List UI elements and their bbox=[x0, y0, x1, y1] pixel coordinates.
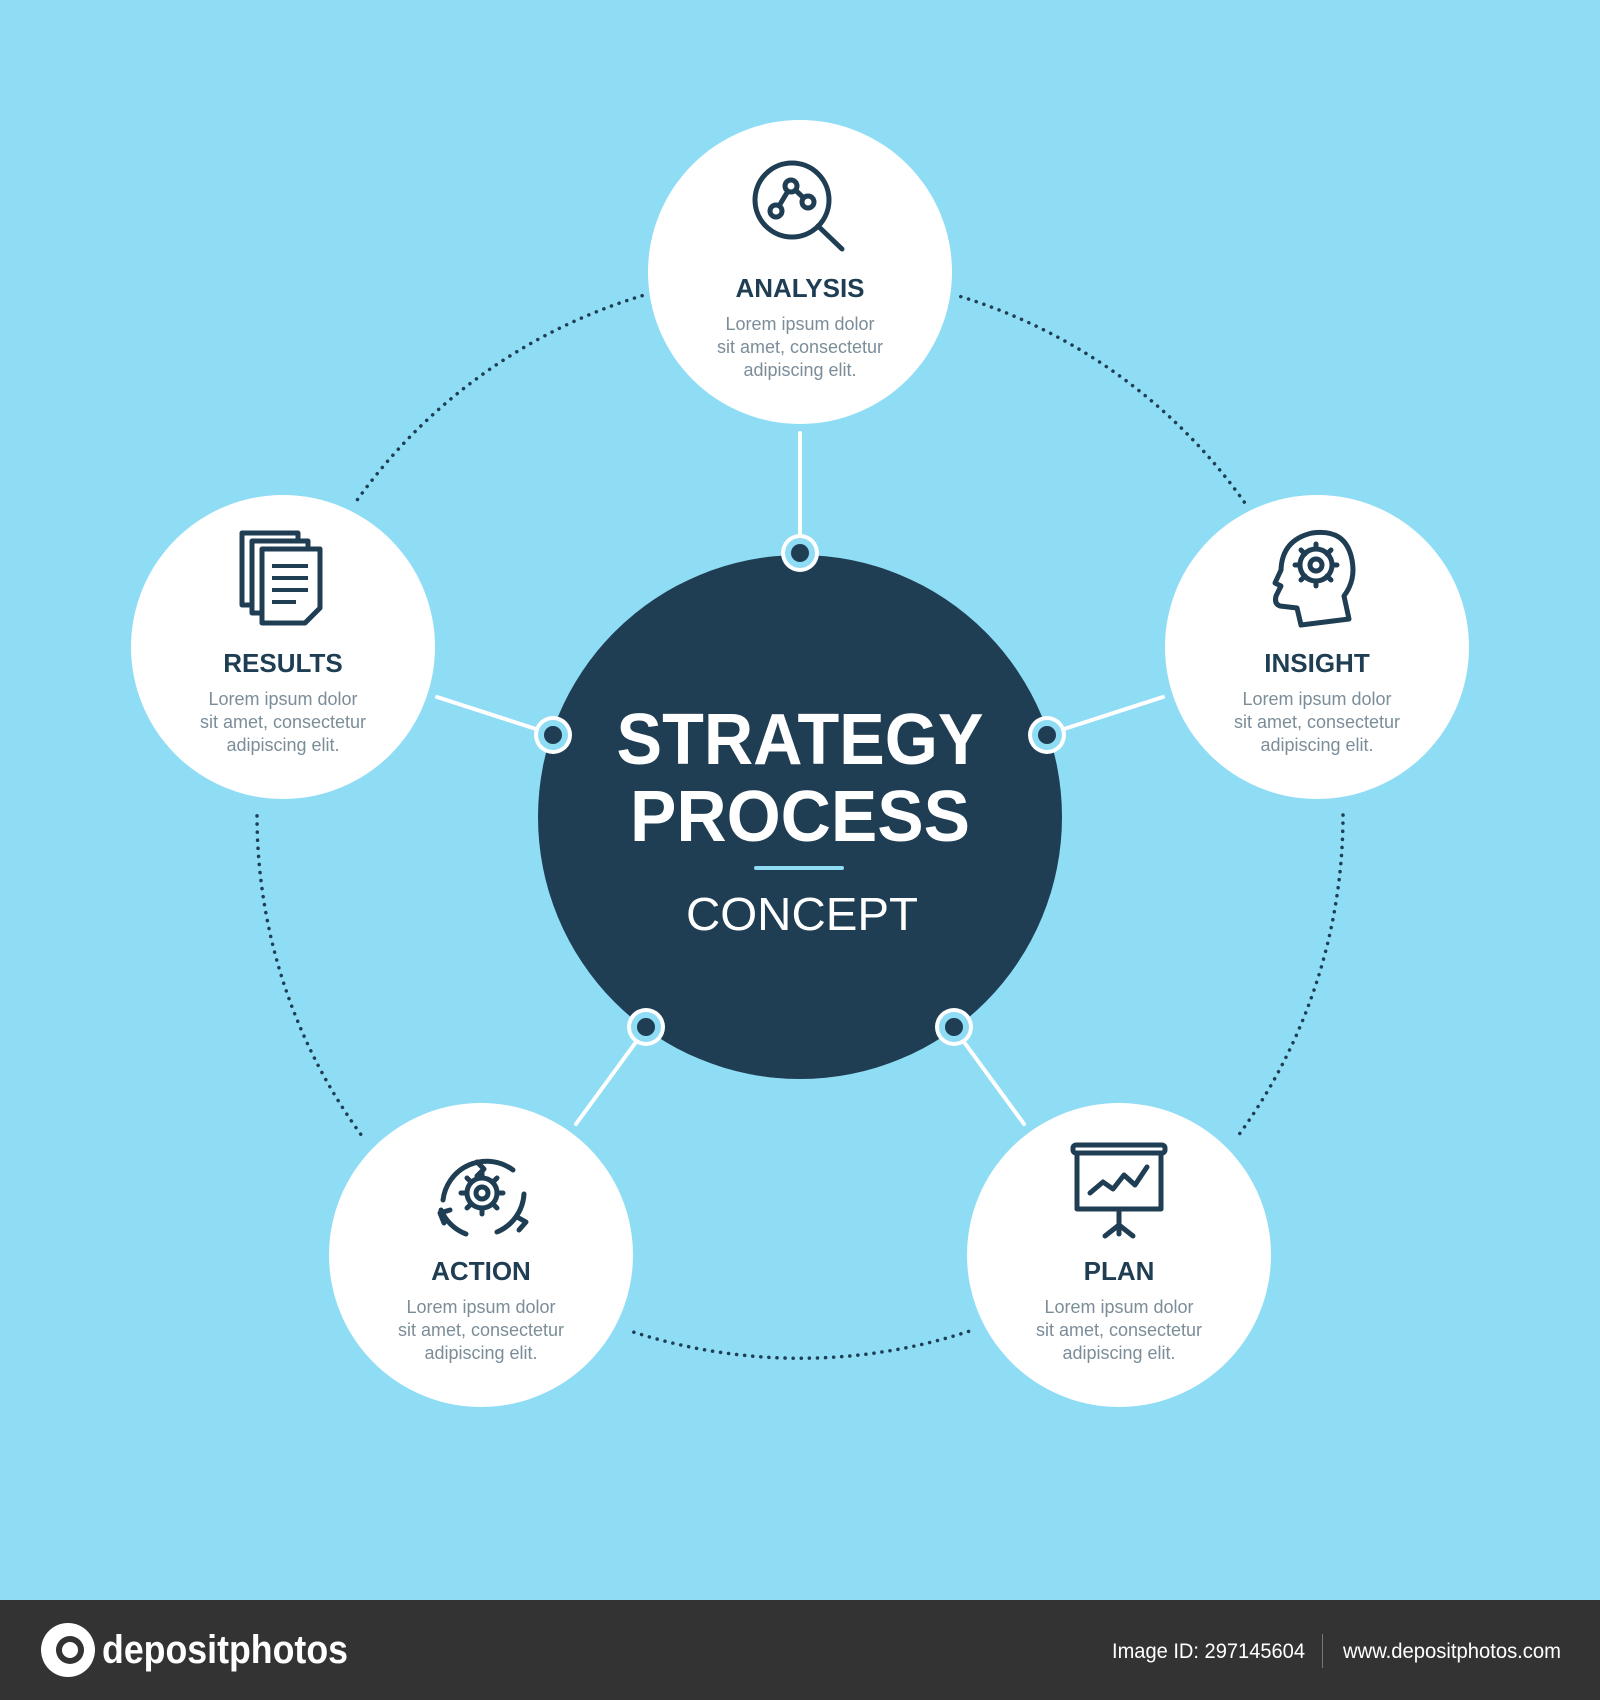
panel: results: adipiscing elit. bbox=[226, 735, 340, 755]
panel: analysis: sit amet, consectetur bbox=[717, 337, 883, 357]
center circle: strategy process concept bbox=[538, 555, 1062, 1079]
center circle: strategy process concept: STRATEGY bbox=[616, 700, 984, 780]
panel: insight: sit amet, consectetur bbox=[1234, 712, 1400, 732]
icon: magnifier with graph bbox=[755, 163, 842, 249]
panel: results: sit amet, consectetur bbox=[200, 712, 366, 732]
dotted outer ring arcs bbox=[257, 296, 1343, 1358]
center circle: strategy process concept: CONCEPT bbox=[686, 888, 918, 940]
panel: insight bbox=[1165, 495, 1469, 799]
panel: analysis: ANALYSIS bbox=[735, 273, 865, 303]
panel: results bbox=[131, 495, 435, 799]
panel: action: ACTION bbox=[431, 1256, 531, 1286]
icon: cycle gear bbox=[440, 1161, 526, 1234]
panel: plan bbox=[967, 1103, 1271, 1407]
icon: head with gear bbox=[1275, 530, 1357, 627]
panel: analysis: adipiscing elit. bbox=[743, 360, 857, 380]
icon: logo camera bbox=[41, 1623, 95, 1677]
panel: plan: adipiscing elit. bbox=[1062, 1343, 1176, 1363]
panel: action: Lorem ipsum dolor bbox=[406, 1297, 556, 1317]
panel: action bbox=[329, 1103, 633, 1407]
panel: action: sit amet, consectetur bbox=[398, 1320, 564, 1340]
connector lines bbox=[437, 433, 1163, 1124]
panel: analysis bbox=[648, 120, 952, 424]
footer bar: depositphotos bbox=[102, 1628, 348, 1672]
panel: action: adipiscing elit. bbox=[424, 1343, 538, 1363]
center circle: strategy process concept: PROCESS bbox=[630, 777, 970, 857]
panel: plan: Lorem ipsum dolor bbox=[1044, 1297, 1194, 1317]
panel: plan: sit amet, consectetur bbox=[1036, 1320, 1202, 1340]
footer bar bbox=[0, 1600, 1600, 1700]
panel: analysis: Lorem ipsum dolor bbox=[725, 314, 875, 334]
panel: results: Lorem ipsum dolor bbox=[208, 689, 358, 709]
panel: results: RESULTS bbox=[223, 648, 343, 678]
icon: documents bbox=[242, 533, 320, 623]
connector dots bbox=[534, 534, 1066, 1046]
panel: insight: INSIGHT bbox=[1264, 648, 1370, 678]
footer bar: www.depositphotos.com bbox=[1342, 1640, 1561, 1663]
footer bar: Image ID: 297145604 bbox=[1112, 1640, 1305, 1663]
panel: plan: PLAN bbox=[1084, 1256, 1154, 1286]
panel: insight: adipiscing elit. bbox=[1260, 735, 1374, 755]
panel: insight: Lorem ipsum dolor bbox=[1242, 689, 1392, 709]
icon: presentation board bbox=[1073, 1145, 1165, 1236]
